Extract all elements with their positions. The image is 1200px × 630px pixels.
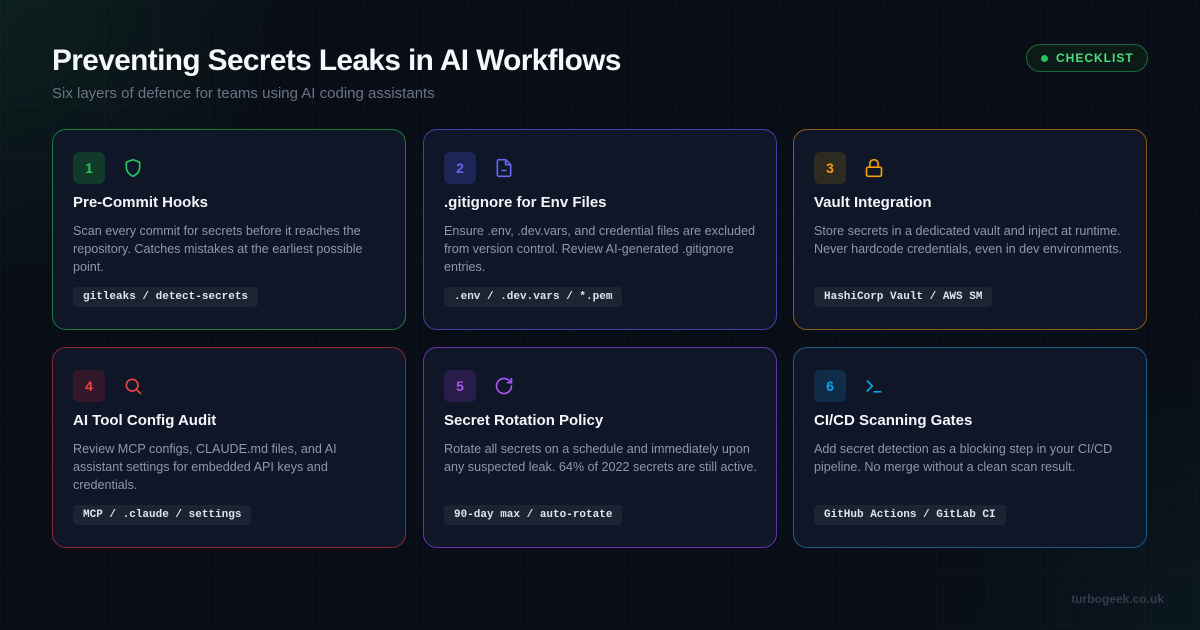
icon: search <box>126 378 142 394</box>
description <box>73 442 337 492</box>
tag: HashiCorp Vault / AWS SM <box>824 291 982 303</box>
heading: Secret Rotation Policy <box>444 412 603 429</box>
description: Never hardcode credentials, even in dev environments. <box>814 242 1122 256</box>
description <box>444 224 755 274</box>
checklist pill: CHECKLIST <box>1056 51 1134 65</box>
icon: shield <box>126 158 140 178</box>
tag: GitHub Actions / GitLab CI <box>824 509 996 521</box>
description: Scan every commit for secrets before it reaches the repository. Catches mistakes at the earliest possible point. <box>73 224 363 274</box>
heading: .gitignore for Env Files <box>444 194 607 211</box>
badge 3: 3 <box>826 160 834 176</box>
heading: AI Tool Config Audit <box>73 412 216 429</box>
badge 1: 1 <box>85 160 93 176</box>
tag <box>814 287 992 307</box>
tag: MCP / .claude / settings <box>83 509 241 521</box>
badge 5 <box>444 370 476 402</box>
description: credentials. <box>73 478 137 492</box>
title: Preventing Secrets Leaks in AI Workflows <box>52 44 621 77</box>
description: Ensure .env, .dev.vars, and credential files are excluded <box>444 224 755 238</box>
badge 5: 5 <box>456 378 464 394</box>
panel: pre-commit hooks <box>52 129 406 330</box>
tag <box>814 505 1006 525</box>
heading: CI/CD Scanning Gates <box>814 412 972 429</box>
panel: gitignore <box>423 129 777 330</box>
tag: gitleaks / detect-secrets <box>83 291 248 303</box>
tag: .env / .dev.vars / *.pem <box>454 291 612 303</box>
icon: file <box>496 158 512 178</box>
panel: vault <box>793 129 1147 330</box>
tag <box>444 287 622 307</box>
icon: lock <box>866 158 882 178</box>
badge 6: 6 <box>826 378 834 394</box>
badge 6 <box>814 370 846 402</box>
badge 1 <box>73 152 105 184</box>
description: assistant settings for embedded API keys and <box>73 460 328 474</box>
heading: Pre-Commit Hooks <box>73 194 208 211</box>
badge 2 <box>444 152 476 184</box>
badge 4 <box>73 370 105 402</box>
description: Review MCP configs, CLAUDE.md files, and AI <box>73 442 337 456</box>
badge 4: 4 <box>85 378 93 394</box>
description: pipeline. No merge without a clean scan result. <box>814 460 1075 474</box>
description: Add secret detection as a blocking step in your CI/CD <box>814 442 1112 456</box>
icon: terminal <box>866 380 882 393</box>
heading: Vault Integration <box>814 194 932 211</box>
tag <box>444 505 622 525</box>
description <box>814 442 1112 474</box>
icon: rotate <box>496 378 512 394</box>
badge 2: 2 <box>456 160 464 176</box>
tag: 90-day max / auto-rotate <box>454 509 612 521</box>
description: Store secrets in a dedicated vault and inject at runtime. <box>814 224 1121 238</box>
panel: rotation <box>423 347 777 548</box>
description <box>444 442 757 474</box>
panel: CI/CD <box>793 347 1147 548</box>
subtitle: Six layers of defence for teams using AI coding assistants <box>52 85 435 102</box>
description: entries. <box>444 260 485 274</box>
badge 3 <box>814 152 846 184</box>
description: any suspected leak. 64% of 2022 secrets are still active. <box>444 460 757 474</box>
description <box>814 224 1122 256</box>
checklist pill <box>1026 44 1148 72</box>
description: Rotate all secrets on a schedule and immediately upon <box>444 442 750 456</box>
tag <box>73 287 258 307</box>
panel: AI config audit <box>52 347 406 548</box>
footer: turbogeek.co.uk <box>1071 592 1164 606</box>
description: from version control. Review AI-generated .gitignore <box>444 242 734 256</box>
tag <box>73 505 251 525</box>
